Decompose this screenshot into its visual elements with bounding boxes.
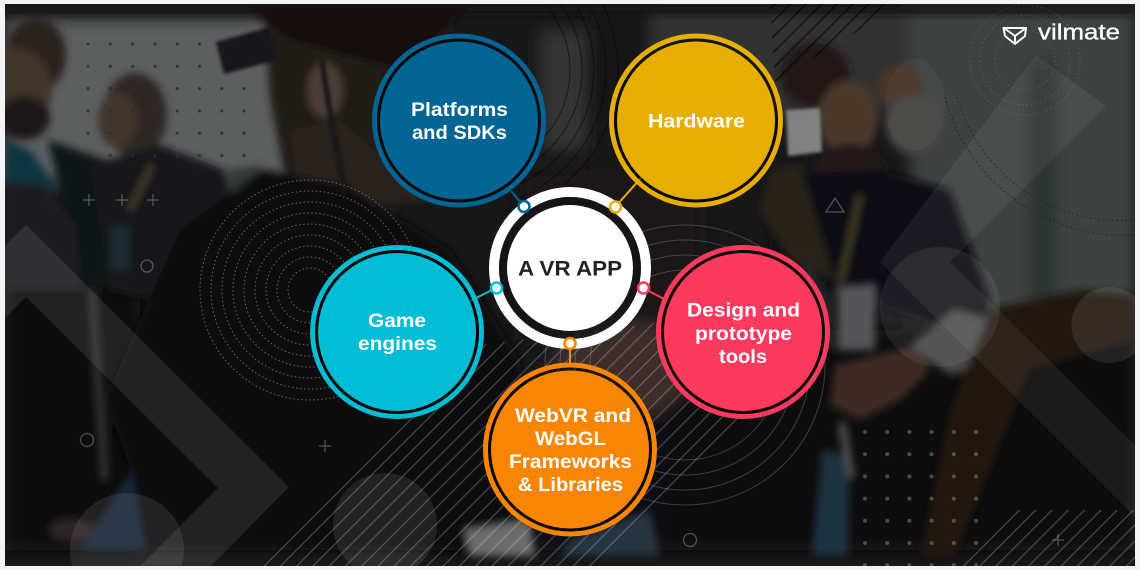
node: WebVR and WebGL Frameworks and Libraries: & Libraries	[518, 475, 623, 496]
small plus, circle and triangle marks	[80, 194, 1064, 546]
node: Design and prototype tools	[658, 248, 828, 416]
node: Hardware	[612, 36, 780, 205]
node: WebVR and WebGL Frameworks and Libraries	[486, 365, 654, 534]
node: WebVR and WebGL Frameworks and Libraries: WebGL	[535, 429, 606, 450]
node: Design and prototype tools: prototype	[695, 324, 792, 345]
node: Hardware: Hardware	[648, 112, 745, 132]
node: Game engines: engines	[358, 334, 437, 355]
node: Platforms and SDKs: Platforms	[411, 100, 508, 121]
connector lines	[468, 178, 668, 364]
node: Platforms and SDKs: and SDKs	[412, 123, 507, 144]
node: Game engines: Game	[368, 311, 426, 332]
logo: vilmate	[1004, 20, 1120, 44]
node: Design and prototype tools: tools	[719, 347, 767, 368]
node: WebVR and WebGL Frameworks and Libraries: Frameworks	[509, 452, 632, 473]
logo: vilmate: vilmate	[1038, 20, 1120, 44]
decorative concentric arcs	[200, 0, 1135, 505]
centre node: A VR APP	[494, 192, 646, 344]
icon: vilmate shield	[1004, 28, 1026, 44]
node: Game engines	[312, 248, 482, 416]
node: Platforms and SDKs	[374, 36, 544, 205]
connector end dots	[491, 201, 649, 349]
node: WebVR and WebGL Frameworks and Libraries: WebVR and	[515, 406, 631, 427]
centre node: A VR APP: A VR APP	[518, 258, 622, 280]
node: Design and prototype tools: Design and	[687, 300, 800, 322]
decorative dot grids	[77, 33, 988, 566]
